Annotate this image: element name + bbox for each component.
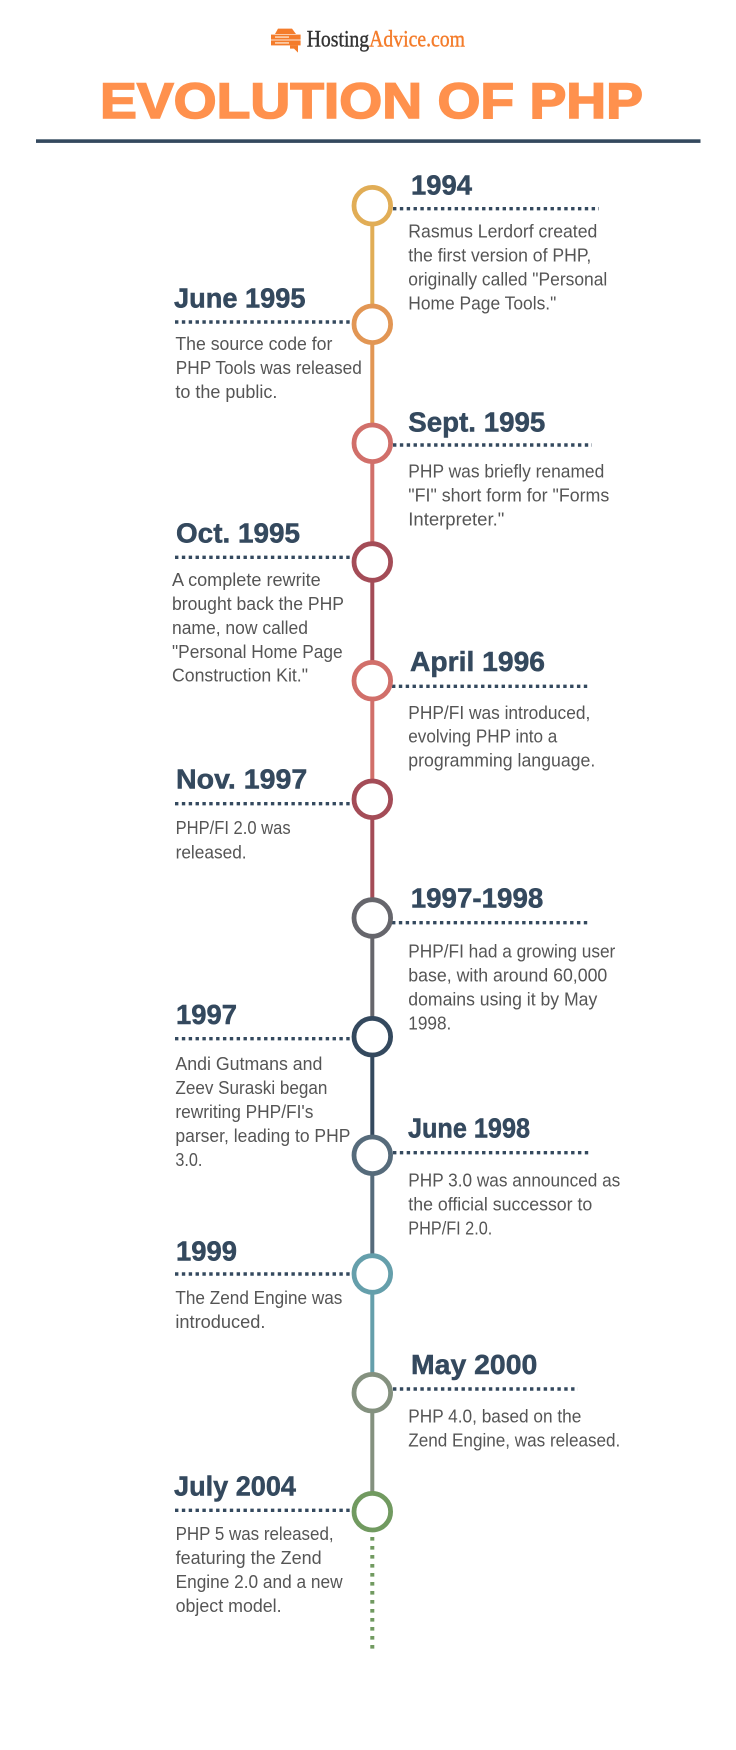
event: Sept. 1995: Sept. 1995	[408, 407, 545, 438]
event: 1997: parser, leading to PHP	[175, 1126, 350, 1146]
event: April 1996: April 1996	[410, 646, 545, 677]
event: April 1996: evolving PHP into a	[408, 726, 558, 746]
title: EVOLUTION OF PHP	[100, 72, 643, 129]
event: June 1995: The source code for	[175, 334, 332, 354]
event: June 1995	[174, 282, 391, 402]
event: Nov. 1997: released.	[176, 842, 247, 862]
event: June 1998	[354, 1113, 620, 1238]
event: April 1996: PHP/FI was introduced,	[408, 703, 590, 723]
event: 1997: 1997	[176, 999, 237, 1030]
event: July 2004: object model.	[176, 1596, 282, 1616]
event: July 2004	[174, 1471, 391, 1616]
event: 1997: Zeev Suraski began	[175, 1078, 327, 1098]
event: July 2004: PHP 5 was released,	[176, 1524, 334, 1544]
event: Oct. 1995: A complete rewrite	[172, 570, 321, 590]
event: June 1998: PHP/FI 2.0.	[408, 1218, 492, 1238]
event: 1997-1998: base, with around 60,000	[408, 965, 607, 985]
event: Nov. 1997: PHP/FI 2.0 was	[176, 818, 291, 838]
event: May 2000: PHP 4.0, based on the	[408, 1407, 581, 1427]
event: 1994	[354, 169, 607, 314]
event: May 2000: Zend Engine, was released.	[408, 1431, 620, 1451]
event: June 1995: PHP Tools was released	[176, 358, 362, 378]
event: 1999: 1999	[176, 1236, 237, 1267]
event: 1997-1998: 1998.	[408, 1013, 451, 1033]
event: 1997-1998: PHP/FI had a growing user	[408, 941, 615, 961]
event: April 1996: programming language.	[408, 750, 595, 770]
event: July 2004: July 2004	[174, 1471, 296, 1502]
timeline spine	[370, 206, 374, 1649]
event: 1997	[175, 999, 391, 1170]
event: 1999: introduced.	[175, 1312, 265, 1332]
icon: server speech bubble	[271, 29, 301, 53]
event: 1997-1998	[354, 882, 615, 1033]
event: June 1995: June 1995	[174, 282, 306, 313]
event: 1997: Andi Gutmans and	[175, 1054, 322, 1074]
event: Oct. 1995: Oct. 1995	[176, 518, 300, 549]
event: Nov. 1997: Nov. 1997	[176, 764, 307, 795]
event: 1999: The Zend Engine was	[175, 1288, 342, 1308]
event: July 2004: featuring the Zend	[176, 1548, 322, 1568]
event: 1994: Home Page Tools."	[408, 294, 556, 314]
event: 1994: originally called "Personal	[408, 270, 607, 290]
event: June 1998: June 1998	[408, 1113, 530, 1144]
event: 1999	[175, 1236, 391, 1332]
event: June 1998: PHP 3.0 was announced as	[408, 1170, 620, 1190]
event: July 2004: Engine 2.0 and a new	[176, 1572, 344, 1592]
event: Oct. 1995: brought back the PHP	[172, 594, 344, 614]
event: 1997: 3.0.	[175, 1150, 202, 1170]
event: June 1995: to the public.	[175, 382, 277, 402]
event: Sept. 1995	[354, 407, 609, 529]
event: 1994: Rasmus Lerdorf created	[408, 222, 597, 242]
event: June 1998: the official successor to	[408, 1194, 592, 1214]
logo wordmark: HostingAdvice.com	[307, 27, 465, 52]
event: 1997-1998: 1997-1998	[411, 882, 543, 913]
event: 1994: the first version of PHP,	[408, 246, 591, 266]
header rule	[36, 139, 700, 143]
event: Sept. 1995: PHP was briefly renamed	[408, 461, 604, 481]
event: May 2000: May 2000	[411, 1349, 537, 1380]
event: Nov. 1997	[175, 764, 391, 862]
event: 1994: 1994	[411, 169, 472, 200]
logo: HostingAdvice.com	[271, 27, 465, 53]
event: Sept. 1995: "FI" short form for "Forms	[408, 485, 609, 505]
event: Oct. 1995: Construction Kit."	[172, 666, 308, 686]
event: 1997-1998: domains using it by May	[408, 989, 597, 1009]
event: Oct. 1995: name, now called	[172, 618, 308, 638]
event: 1997: rewriting PHP/FI's	[175, 1102, 313, 1122]
event: May 2000	[354, 1349, 620, 1451]
event: Oct. 1995	[172, 518, 391, 686]
event: April 1996	[354, 646, 595, 770]
event: Oct. 1995: "Personal Home Page	[172, 642, 343, 662]
event: Sept. 1995: Interpreter."	[408, 509, 504, 529]
